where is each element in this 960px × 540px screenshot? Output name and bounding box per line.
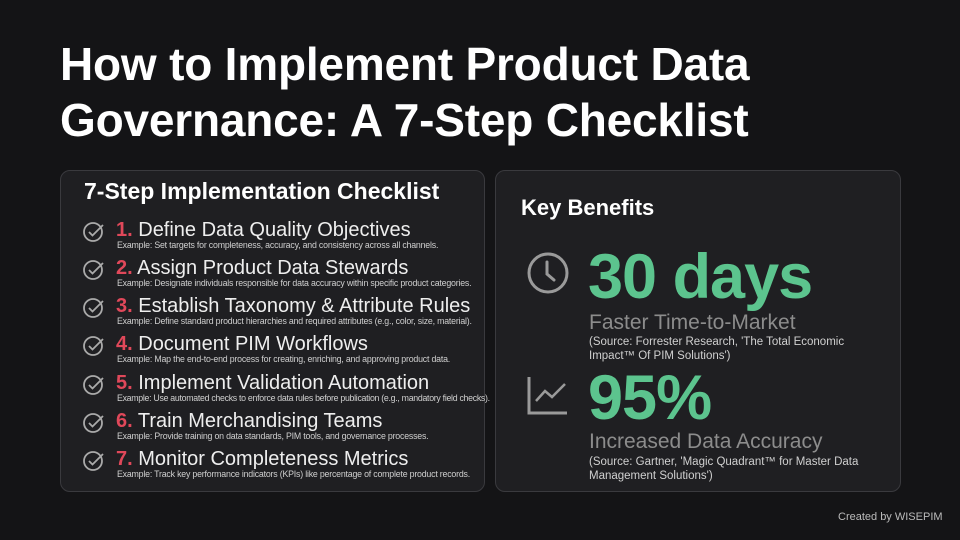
step 6: Example: Provide training on data standards, PIM tools, and governance processes. (117, 431, 428, 441)
step 6 (83, 410, 428, 441)
step 5 (83, 372, 490, 403)
footer credit: Created by WISEPIM (838, 511, 943, 523)
step 5: Example: Use automated checks to enforce data rules before publication (e.g., mandatory field checks). (117, 393, 490, 403)
label: increased data accuracy: Increased Data Accuracy (589, 430, 822, 453)
step 1: 1. Define Data Quality Objectives (116, 219, 411, 241)
step 2: Example: Designate individuals responsible for data accuracy within specific product categories. (117, 278, 471, 288)
source 2 (589, 456, 858, 482)
source 2: (Source: Gartner, 'Magic Quadrant™ for Master Data (589, 456, 858, 468)
source 1 (589, 336, 844, 362)
step 1: Example: Set targets for completeness, accuracy, and consistency across all channels. (117, 240, 438, 250)
source 1: (Source: Forrester Research, 'The Total Economic (589, 336, 844, 348)
stat: 95%: 95% (588, 363, 711, 433)
panel: key benefits (495, 170, 901, 492)
step 2 (83, 257, 471, 288)
checklist heading: 7-Step Implementation Checklist (84, 178, 439, 204)
step 4: Example: Map the end-to-end process for creating, enriching, and approving product data. (117, 354, 450, 364)
step 3: 3. Establish Taxonomy & Attribute Rules (116, 295, 470, 317)
step 6: 6. Train Merchandising Teams (116, 410, 382, 432)
step 4 (83, 333, 450, 364)
title (60, 38, 750, 146)
step 2: 2. Assign Product Data Stewards (116, 257, 408, 279)
title: Governance: A 7-Step Checklist (60, 94, 748, 146)
icon: clock (528, 252, 568, 294)
step 7 (83, 448, 470, 479)
step 5: 5. Implement Validation Automation (116, 372, 429, 394)
step 3: Example: Define standard product hierarchies and required attributes (e.g., color, size, material). (117, 316, 472, 326)
source 2: Management Solutions') (589, 470, 713, 482)
source 1: Impact™ Of PIM Solutions') (589, 350, 731, 362)
label: faster time-to-market: Faster Time-to-Market (589, 311, 796, 334)
step 1 (83, 219, 438, 250)
step 3 (83, 295, 472, 326)
title: How to Implement Product Data (60, 38, 749, 90)
step 7: Example: Track key performance indicators (KPIs) like percentage of complete product records. (117, 469, 470, 479)
icon: chart (528, 377, 567, 414)
panel: checklist (60, 170, 485, 492)
benefits heading: Key Benefits (521, 195, 654, 220)
step 4: 4. Document PIM Workflows (116, 333, 368, 355)
step 7: 7. Monitor Completeness Metrics (116, 448, 408, 470)
stat: 30 days: 30 days (588, 242, 812, 312)
